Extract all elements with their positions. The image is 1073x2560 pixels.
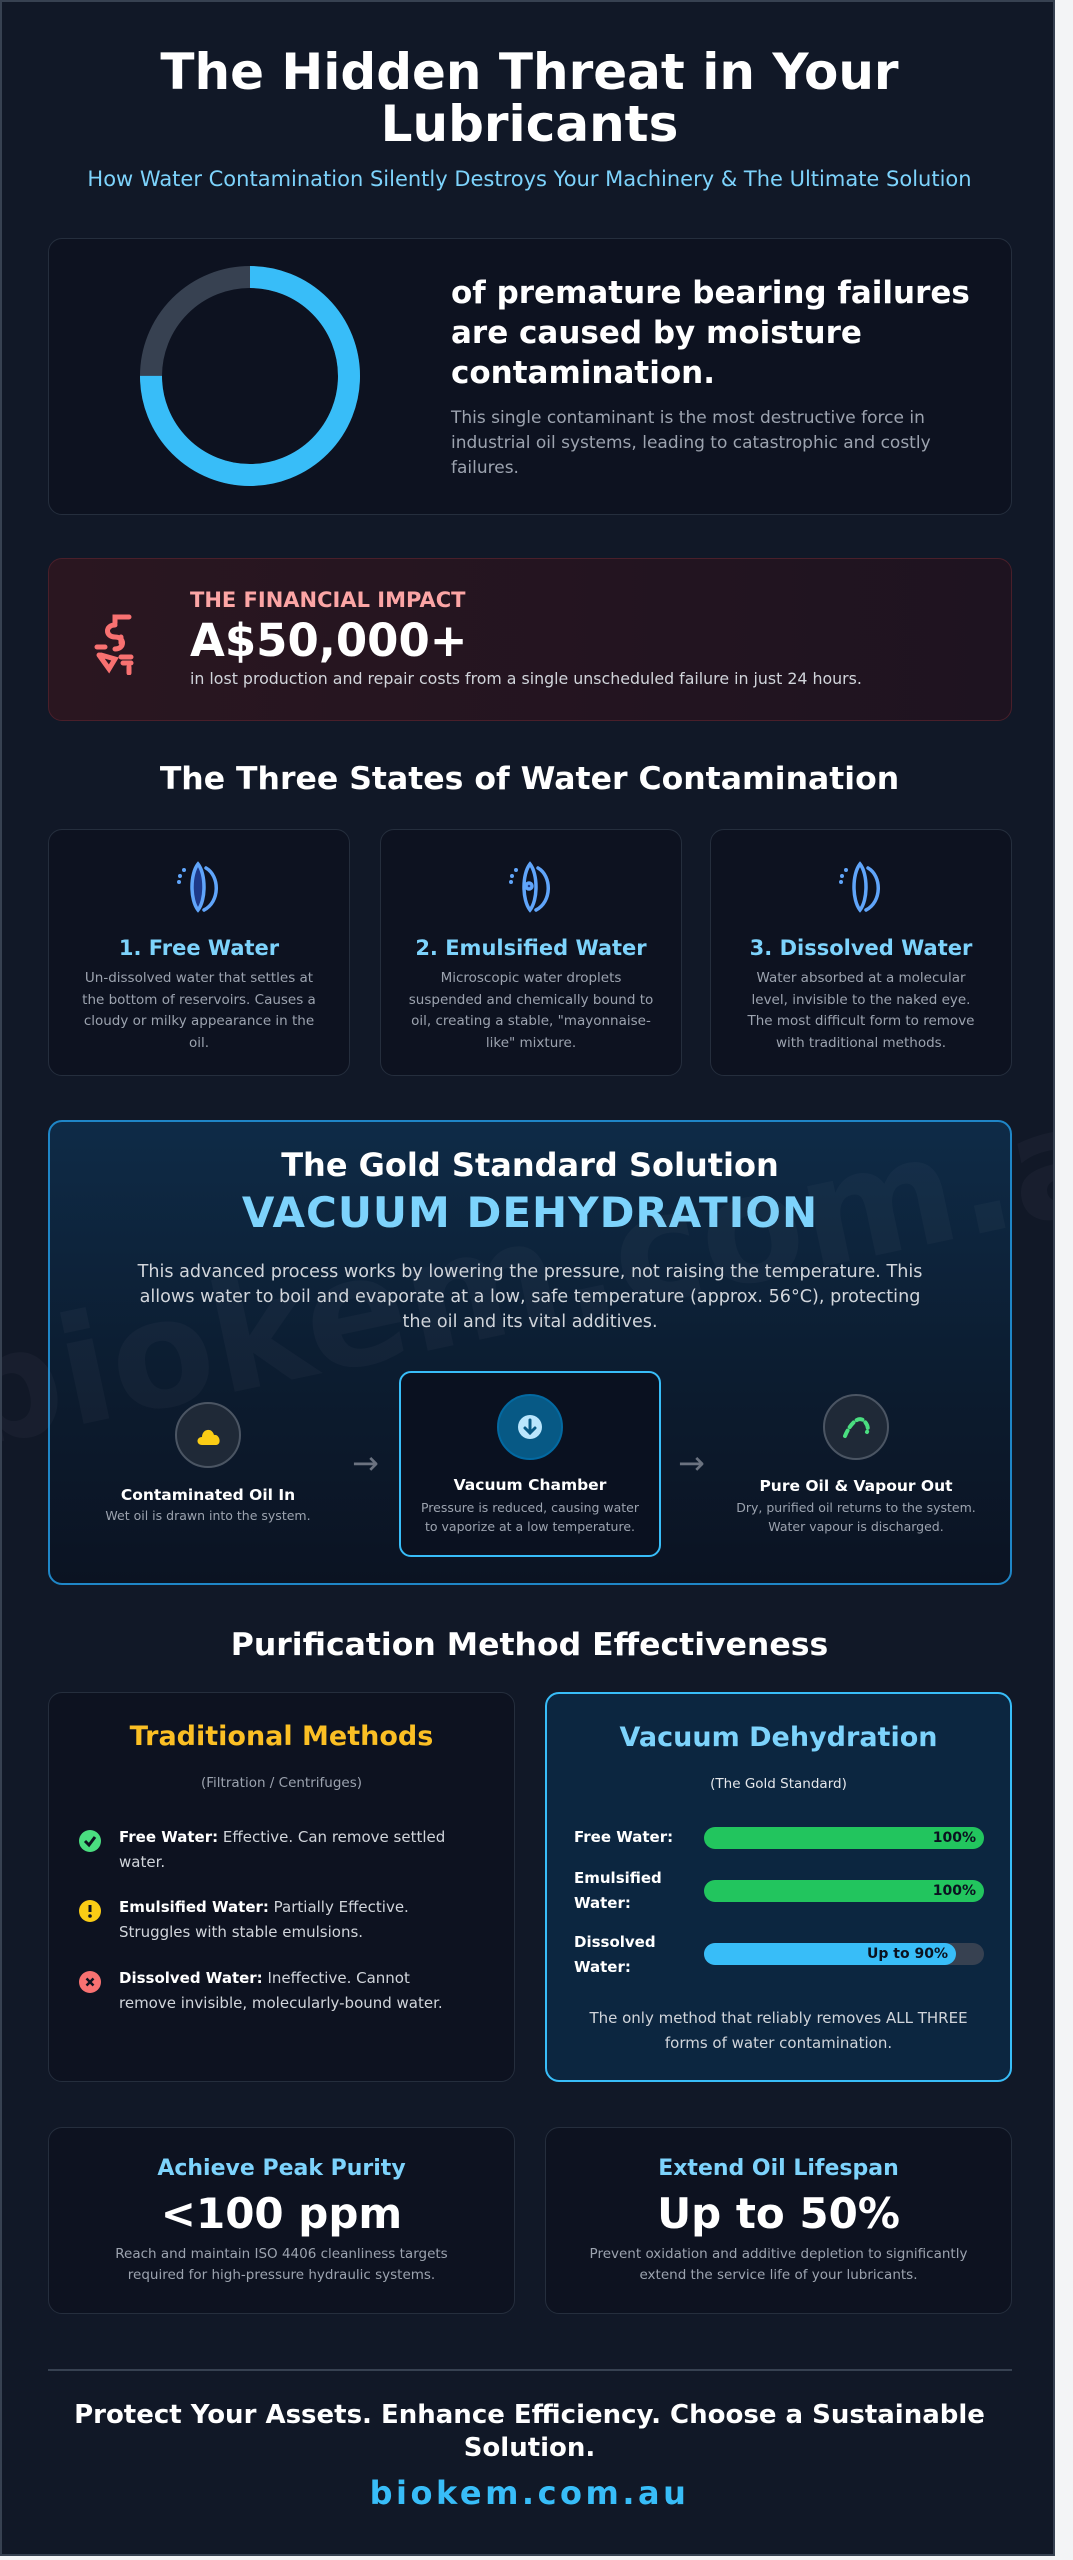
panel: oil lifespan: Extend Oil Lifespan: [658, 2156, 899, 2181]
icon: down arrow: [497, 1394, 563, 1460]
item: dissolved water: [79, 1969, 443, 2012]
step 2: vacuum chamber: Vacuum Chamber: [454, 1476, 606, 1494]
description: Water absorbed at a molecular: [756, 970, 966, 986]
item: free water: water.: [119, 1853, 165, 1871]
step 2: vacuum chamber: to vaporize at a low temperature.: [425, 1519, 635, 1534]
step 1: Contaminated Oil In: [121, 1486, 295, 1504]
statistic description: This single contaminant is the most destructive force in: [451, 408, 925, 428]
panel: financial impact: [48, 558, 1012, 721]
item: emulsified water: Struggles with stable emulsions.: [119, 1923, 363, 1941]
description: the oil and its vital additives.: [402, 1312, 658, 1332]
icon: warning: [79, 1900, 101, 1922]
icon: drop: [839, 861, 880, 913]
panel: vacuum dehydration effectiveness: [545, 1692, 1012, 2082]
description: oil, creating a stable, "mayonnaise-: [411, 1013, 651, 1029]
icon: green arc: [823, 1394, 889, 1460]
title: 1. Free Water: [119, 936, 279, 960]
subtitle: (Filtration / Centrifuges): [201, 1775, 362, 1791]
description: allows water to boil and evaporate at a low, safe temperature (approx. 56°C), protecting: [140, 1287, 920, 1307]
icon: drop: [177, 861, 218, 913]
heading: effectiveness: Purification Method Effectiveness: [231, 1627, 828, 1663]
title: 2. Emulsified Water: [415, 936, 647, 960]
title: Lubricants: [381, 95, 678, 153]
icon: money hand: [94, 614, 134, 675]
description: oil.: [189, 1034, 209, 1050]
subtitle: How Water Contamination Silently Destroys Your Machinery & The Ultimate Solution: [87, 167, 972, 191]
arrow 1: →: [352, 1444, 379, 1482]
footer url: biokem.com.au: [370, 2474, 689, 2512]
step 1: [105, 1402, 311, 1523]
subtitle: (The Gold Standard): [710, 1776, 847, 1792]
title: 3. Dissolved Water: [750, 936, 972, 960]
description: cloudy or milky appearance in the: [84, 1013, 314, 1029]
step 3: Dry, purified oil returns to the system.: [736, 1500, 976, 1515]
icon: check: [79, 1830, 101, 1852]
icon: cloud: [175, 1402, 241, 1468]
description: the bottom of reservoirs. Causes a: [82, 992, 316, 1008]
title: Vacuum Dehydration: [620, 1722, 937, 1753]
title: [160, 43, 899, 153]
bar chart: Dissolved: [574, 1933, 656, 1951]
description: [138, 1262, 922, 1332]
step 1: Wet oil is drawn into the system.: [105, 1508, 311, 1523]
donut chart: [140, 266, 360, 486]
bar chart: [574, 1827, 984, 1976]
panel: oil lifespan: [545, 2127, 1012, 2314]
panel: emulsified water: [380, 829, 682, 1076]
description: suspended and chemically bound to: [409, 992, 653, 1008]
panel: peak purity: required for high-pressure hydraulic systems.: [128, 2267, 435, 2283]
bar chart: 100%: [933, 1830, 976, 1846]
footer tagline: Protect Your Assets. Enhance Efficiency. Choose a Sustainable Solution.: [74, 2400, 985, 2463]
description: like" mixture.: [486, 1034, 576, 1050]
panel: oil lifespan: Prevent oxidation and additive depletion to significantly: [590, 2246, 967, 2262]
icon: cross: [79, 1971, 101, 1993]
conclusion: The only method that reliably removes ALL THREE forms of water contamination.: [589, 2009, 968, 2052]
step 3: Water vapour is discharged.: [768, 1519, 944, 1534]
panel: peak purity: Reach and maintain ISO 4406 cleanliness targets: [115, 2246, 448, 2262]
bar chart: Up to 90%: [867, 1946, 948, 1962]
panel: oil lifespan: extend the service life of your lubricants.: [639, 2267, 918, 2283]
bar chart: Free Water:: [574, 1828, 673, 1846]
statistic description: failures.: [451, 458, 519, 478]
description: The most difficult form to remove: [748, 1013, 974, 1029]
panel: peak purity: [48, 2127, 515, 2314]
description: This advanced process works by lowering the pressure, not raising the temperature. This: [138, 1262, 922, 1282]
item: dissolved water: Dissolved Water: Ineffective. Cannot: [119, 1969, 410, 1987]
panel: peak purity: Achieve Peak Purity: [157, 2156, 406, 2181]
heading: three states: The Three States of Water Contamination: [160, 761, 899, 797]
panel: vacuum dehydration solution: [48, 1120, 1012, 1585]
panel: traditional methods: [48, 1692, 515, 2082]
panel: oil lifespan: Up to 50%: [657, 2189, 900, 2238]
statistic heading: [451, 275, 970, 391]
description: with traditional methods.: [776, 1034, 946, 1050]
arrow 2: →: [678, 1444, 705, 1482]
label: THE FINANCIAL IMPACT: [190, 588, 465, 612]
panel: moisture statistic: [48, 238, 1012, 515]
item: free water: [79, 1828, 445, 1871]
step 2: vacuum chamber: Pressure is reduced, causing water: [421, 1500, 639, 1515]
item: emulsified water: Emulsified Water: Partially Effective.: [119, 1898, 409, 1916]
bar chart: Water:: [574, 1894, 631, 1912]
item: dissolved water: remove invisible, molecularly-bound water.: [119, 1994, 443, 2012]
item: free water: Free Water: Effective. Can remove settled: [119, 1828, 445, 1846]
statistic heading: of premature bearing failures: [451, 275, 970, 311]
step 2: vacuum chamber: [399, 1371, 661, 1557]
description: [409, 970, 653, 1050]
description: in lost production and repair costs from a single unscheduled failure in just 24 hours.: [190, 669, 862, 688]
heading: The Gold Standard Solution: [281, 1146, 779, 1184]
statistic description: industrial oil systems, leading to catastrophic and costly: [451, 433, 931, 453]
icon: drop: [509, 861, 550, 913]
bar chart: Water:: [574, 1958, 631, 1976]
description: Microscopic water droplets: [441, 970, 621, 986]
description: [82, 970, 316, 1050]
step 3: Pure Oil & Vapour Out: [759, 1477, 953, 1495]
title: Traditional Methods: [130, 1721, 433, 1752]
panel: peak purity: <100 ppm: [161, 2189, 402, 2238]
item: emulsified water: [79, 1898, 409, 1941]
bar chart: 100%: [933, 1883, 976, 1899]
description: level, invisible to the naked eye.: [752, 992, 970, 1008]
big number: A$50,000+: [190, 614, 468, 667]
title: The Hidden Threat in Your: [160, 43, 899, 101]
panel: dissolved water: [710, 829, 1012, 1076]
heading highlight: VACUUM DEHYDRATION: [242, 1188, 818, 1237]
bar chart: Emulsified: [574, 1869, 662, 1887]
step 3: [736, 1394, 976, 1534]
statistic heading: contamination.: [451, 355, 715, 391]
statistic heading: are caused by moisture: [451, 315, 862, 351]
panel: free water: [48, 829, 350, 1076]
statistic description: [450, 408, 931, 478]
description: Un-dissolved water that settles at: [85, 970, 313, 986]
description: [747, 970, 974, 1050]
